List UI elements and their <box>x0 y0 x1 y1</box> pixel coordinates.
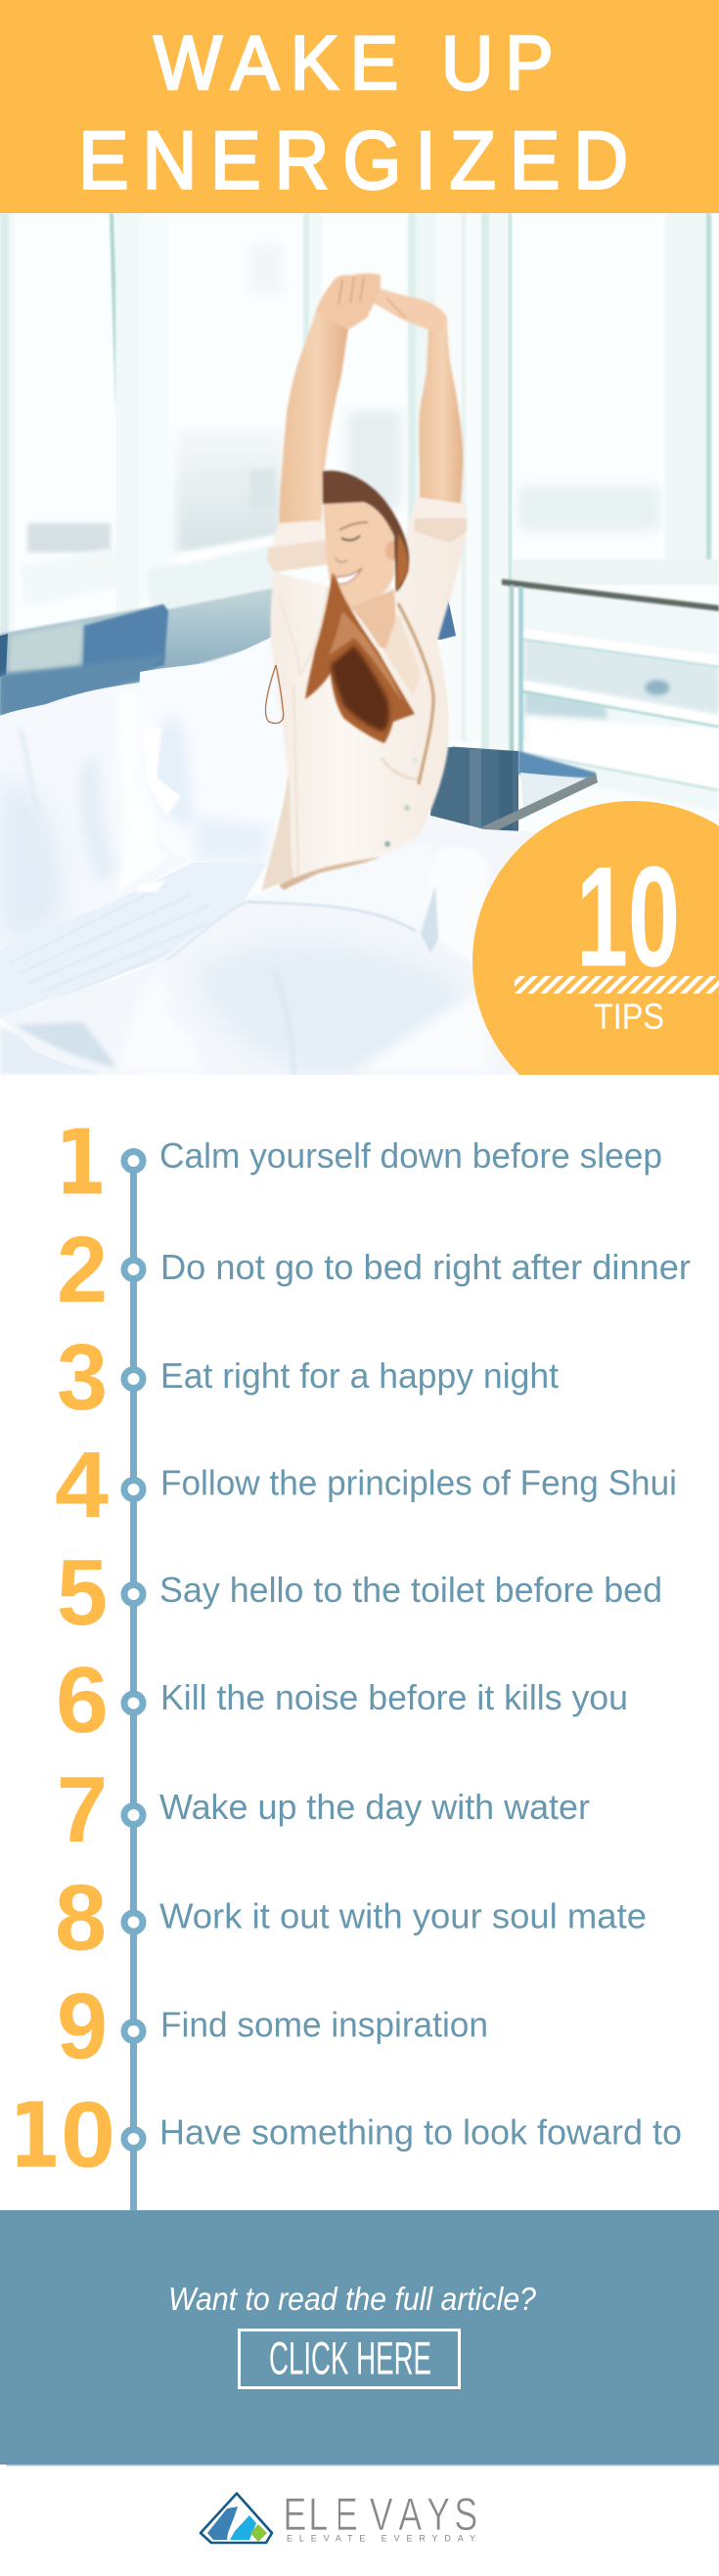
tip 4 <box>55 1433 677 1537</box>
logo mark: mountain <box>201 2494 272 2543</box>
blue headboard <box>0 587 456 747</box>
elevays logo <box>201 2488 477 2543</box>
front pillow <box>0 683 189 949</box>
tip 1: Calm yourself down before sleep <box>159 1135 662 1176</box>
tip 10 <box>9 2083 682 2189</box>
tip 1 <box>55 1111 662 1215</box>
tip 8: 8 <box>55 1866 107 1970</box>
tip 5 <box>57 1540 662 1645</box>
tip 6: 6 <box>56 1648 109 1753</box>
tip 3: Eat right for a happy night <box>160 1355 559 1396</box>
click here button <box>239 2330 460 2388</box>
tip 9 <box>57 1974 488 2079</box>
window frames <box>0 213 719 761</box>
right railing window <box>502 579 719 812</box>
title line: wake up: WAKE UP <box>154 21 554 106</box>
click here button: CLICK HERE <box>269 2332 431 2384</box>
woman's arms and hands <box>280 274 463 533</box>
tip 4: Follow the principles of Feng Shui <box>160 1463 677 1502</box>
tip 9: Find some inspiration <box>160 2005 488 2044</box>
tip 1: 1 <box>55 1111 107 1215</box>
tip 8 <box>55 1866 647 1970</box>
tip 3: 3 <box>57 1325 108 1430</box>
tip 2: Do not go to bed right after dinner <box>160 1247 691 1287</box>
badge label: TIPS <box>594 997 664 1037</box>
tip 10: 1 <box>9 2083 61 2189</box>
tip 5: Say hello to the toilet before bed <box>159 1570 662 1610</box>
duvet <box>11 816 518 1075</box>
back pillow <box>139 637 272 863</box>
tip 9: 9 <box>57 1974 108 2079</box>
dark bedside table <box>430 745 598 834</box>
tip 6: Kill the noise before it kills you <box>160 1677 628 1717</box>
badge: 10 tips <box>472 801 719 1075</box>
tip 10: 0 <box>61 2083 115 2187</box>
tip 2: 2 <box>57 1218 108 1322</box>
woman's hair <box>265 470 433 784</box>
woman's shirt <box>261 497 467 892</box>
logo wordmark: ELEVAYS <box>284 2488 477 2540</box>
tip 10: Have something to look foward to <box>159 2112 682 2152</box>
tip 2 <box>57 1218 691 1322</box>
tip 7: 7 <box>57 1757 108 1862</box>
tip 7: Wake up the day with water <box>159 1787 590 1827</box>
tip 8: Work it out with your soul mate <box>159 1895 647 1936</box>
timeline spine <box>130 1161 137 2212</box>
window sills <box>95 534 276 608</box>
tip 5: 5 <box>57 1540 108 1645</box>
woman's neck and face <box>323 500 421 697</box>
blurred buildings outside <box>27 244 660 554</box>
title banner <box>0 0 719 213</box>
tip 7 <box>57 1757 590 1862</box>
hero photo: woman stretching in bed <box>0 213 719 1122</box>
striped divider <box>515 976 719 994</box>
call to action question: Want to read the full article? <box>168 2281 537 2317</box>
tip 3 <box>57 1325 559 1430</box>
sheet <box>0 863 267 1075</box>
call to action panel <box>0 2210 719 2466</box>
title line: energized: ENERGIZED <box>78 115 628 206</box>
tip 4: 4 <box>55 1433 109 1537</box>
logo tagline: ELEVATE EVERYDAY <box>287 2533 475 2543</box>
tip 6 <box>56 1648 628 1753</box>
